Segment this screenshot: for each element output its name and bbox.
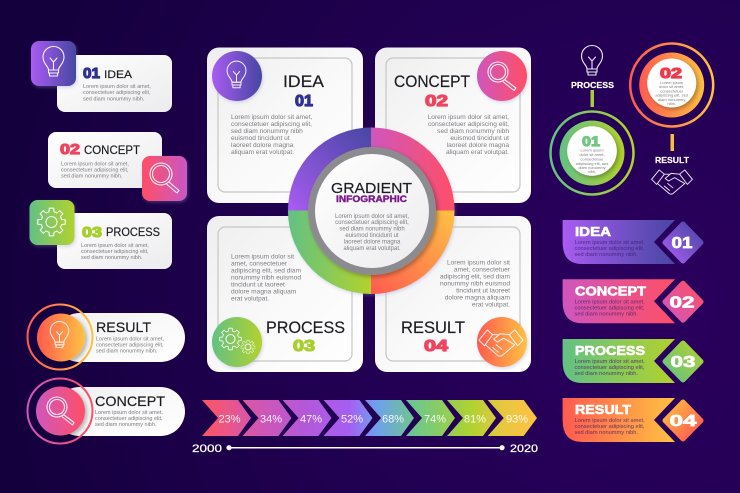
heading [82,224,160,241]
process bulb with label: PROCESS [571,80,614,90]
icon: bulb circle with ring [28,304,92,370]
center text block: laoreet dolore magna [344,239,401,245]
heading: CONCEPT [84,145,140,157]
result label with handshake [652,134,692,194]
icon: gear square [30,200,74,245]
central ring [288,127,455,294]
text block: sed diam nonummy nibh [437,128,509,135]
banner: result: sed diam nonummy nibh. [574,430,638,436]
text block: Lorem ipsum dolor sit amet, [428,114,509,121]
banner: idea: 01 [672,235,693,252]
heading: RESULT [96,319,151,335]
timeline: 2000 [192,443,222,455]
heading: IDEA [104,69,133,81]
circle: 02 [630,44,713,126]
banner: concept: sed diam nonummy nibh. [574,311,638,317]
center text block: consectetuer adipiscing elit, [335,220,409,226]
circle: 01: consectetuer [581,156,604,162]
circle: 01: adipiscing elit, sed [576,161,608,166]
circle: 01: diam nonummy [578,165,606,170]
icon: light bulb square [31,41,76,86]
result label with handshake: RESULT [655,155,690,165]
chevron chart: 74% [424,414,446,426]
text block: consectetuer adipiscing elit, [428,121,509,128]
banner: result: RESULT [575,402,631,417]
text block: laoreet dolore magna [447,142,509,149]
circle: 02: dolor sit amet, [659,84,684,89]
card: 03 process [30,200,172,269]
banner: result: consectetuer adipiscing elit, [574,424,645,430]
chevron chart: 34% [260,414,282,426]
text block: sed diam nonummy nibh. [96,348,158,354]
banner: concept: 02 [670,294,695,311]
panel: concept [375,48,531,203]
text block: consectetuer adipiscing elit, [61,168,129,174]
banner: concept: consectetuer adipiscing elit, [574,305,645,311]
heading: 01 [83,65,100,82]
text block: tincidunt ut laoreet [231,281,285,288]
number: 04 [424,338,448,355]
banner: process: sed diam nonummy nibh. [574,371,638,377]
circle: 02: diam nonummy [658,97,685,102]
heading: CONCEPT [95,393,165,409]
text block: amet, consectetuer [231,260,288,267]
circle: 02: nibh. [667,101,676,106]
timeline: 2020 [510,443,538,455]
circle: 01 [550,112,634,194]
text block: consectetuer adipiscing elit, [231,121,312,128]
banner: process: 03 [670,354,696,371]
center title: GRADIENT [331,180,412,197]
text block: tincidunt ut laoreet [456,287,510,294]
text block: sed diam nonummy nibh. [83,96,145,102]
text block: Lorem ipsum dolor sit amet, [81,243,149,249]
heading: CONCEPT [394,73,470,91]
text block: aliquam erat volutpat. [231,149,294,156]
text block: erat volutpat. [472,301,510,308]
text block: euismod tincidunt ut [450,135,509,142]
banner: idea: consectetuer adipiscing elit, [574,246,645,252]
text block: consectetuer adipiscing elit, [95,416,163,422]
number: 01 [295,93,313,110]
banner: result [563,398,701,442]
banner: process: Lorem ipsum dolor sit amet, [574,359,645,365]
banner: concept: Lorem ipsum dolor sit amet, [574,299,645,305]
circle: 02: 02 [660,65,682,82]
text block: aliquam erat volutpat. [446,149,509,156]
heading: 03 [82,224,102,241]
text block: erat volutpat. [231,295,269,302]
heading: 02 [60,141,80,158]
text block: Lorem ipsum dolor sit amet, [83,84,151,90]
banner: idea: Lorem ipsum dolor sit amet, [574,240,645,246]
panel: process [207,216,363,372]
text block: adipiscing elit, sed diam [440,273,510,280]
text block: Lorem ipsum dolor sit [447,259,510,266]
panel: result [375,216,531,372]
chevron chart [202,400,537,436]
timeline [192,443,538,455]
text block: Lorem ipsum dolor sit amet, [231,114,313,121]
text block: laoreet dolore magna [231,142,294,149]
banner: result: Lorem ipsum dolor sit amet, [574,418,645,424]
icon: bulb circle [212,51,262,101]
text block: nonummy nibh euismod [440,280,510,287]
heading [60,141,140,158]
number: 03 [293,338,315,355]
banner: concept [563,279,701,323]
text block: Lorem ipsum dolor sit amet, [61,162,129,168]
heading: RESULT [401,319,465,337]
chevron chart: 52% [341,414,363,426]
circle: 01: 01 [582,133,600,149]
card: 02 concept [48,132,187,201]
circle: 01: dolor sit amet, [579,152,605,157]
chevron chart: 93% [506,414,528,426]
text block: sed diam nonummy nibh. [95,422,157,428]
banner: idea [563,220,701,264]
card: 01 idea [31,41,172,112]
text block: euismod tincidunt ut [231,135,290,142]
pill: result [28,304,185,370]
banner: concept: CONCEPT [575,283,646,298]
banner: result: 04 [670,413,697,430]
center text block: euismod tincidunt ut [345,233,399,239]
banner: idea: IDEA [575,224,612,239]
text block: consectetuer adipiscing elit, [83,90,151,96]
heading: PROCESS [106,227,160,239]
text block: amet, consectetuer [454,266,511,273]
chevron chart: 47% [300,414,322,426]
chevron chart: 23% [218,414,241,426]
icon: gears circle [212,317,262,367]
circle: 02: Lorem ipsum [660,80,684,85]
text block: consectetuer adipiscing elit, [96,342,164,348]
center text block: Lorem ipsum dolor sit amet, [335,214,409,220]
chevron chart: 68% [382,414,404,426]
icon: magnifier circle with ring [28,378,92,444]
banner: process [563,339,701,383]
icon: magnifier circle [477,51,527,101]
heading [83,65,133,82]
heading: PROCESS [266,319,345,337]
center text block: aliquam erat volutpat. [343,246,401,252]
text block: nonummy nibh euismod [231,274,301,281]
text block: sed diam nonummy nibh [231,128,303,135]
banner: process: PROCESS [575,343,645,358]
text block: sed diam nonummy nibh. [61,174,123,180]
number: 02 [425,93,448,110]
circle: 02: adipiscing elit, sed [655,93,688,98]
chevron chart: 81% [464,414,486,426]
text block: Lorem ipsum dolor sit amet, [95,410,163,416]
text block: Lorem ipsum dolor sit [231,253,294,260]
banner: process: consectetuer adipiscing elit, [574,365,645,371]
text block: dolore magna aliquam [231,288,297,295]
circle: 01: Lorem ipsum [580,148,604,152]
text block: adipiscing elit, sed diam [231,267,302,274]
pill: concept [28,378,185,444]
text block: dolore magna aliquam [445,294,511,301]
center title [331,180,412,204]
circle: 01: nibh. [588,169,596,174]
center text block: sed diam nonummy nibh [339,227,405,233]
banner: idea: sed diam nonummy nibh. [574,252,638,258]
panel: idea [207,48,363,203]
icon: magnifier square [142,156,187,201]
process bulb with label [571,46,614,107]
heading: IDEA [283,73,324,91]
center title: INFOGRAPHIC [336,194,408,204]
text block: consectetuer adipiscing elit, [81,249,149,255]
icon: handshake circle [477,317,527,367]
text block: Lorem ipsum dolor sit amet, [96,336,164,342]
circle: 02: consectetuer [660,88,684,93]
text block: sed diam nonummy nibh. [81,255,143,261]
